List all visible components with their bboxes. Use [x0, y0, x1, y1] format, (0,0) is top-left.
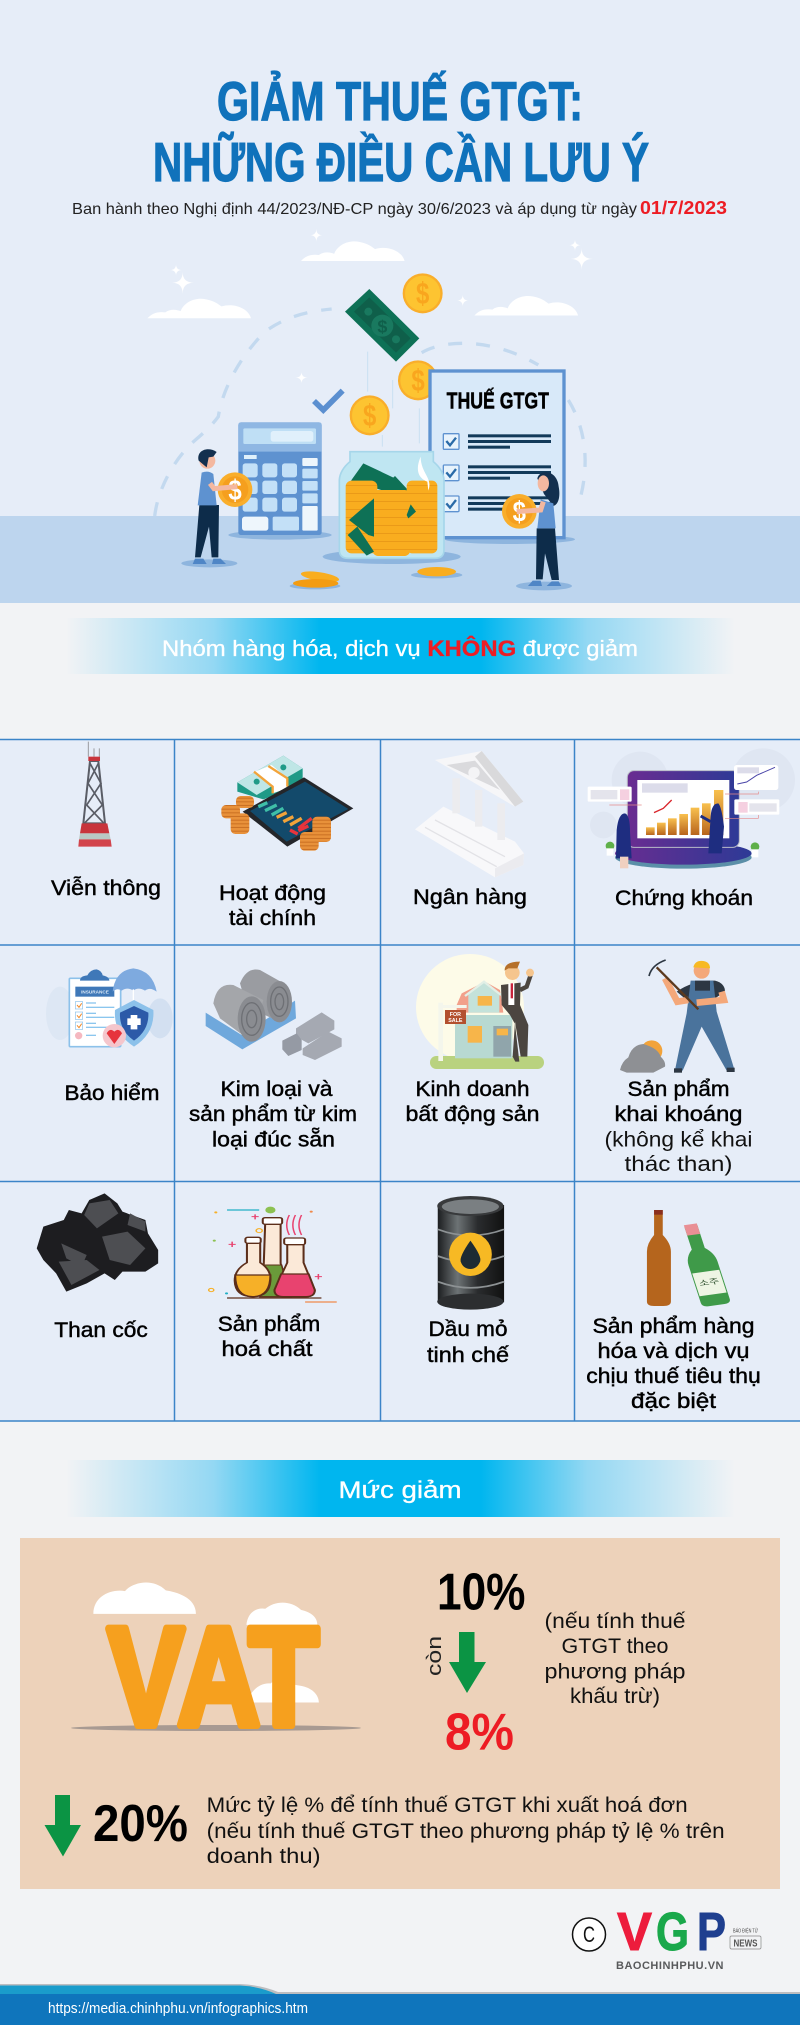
label: Chứng khoán	[615, 887, 753, 910]
deduction method note: khấu trừ)	[570, 1685, 660, 1708]
copyright mark: C	[583, 1922, 595, 1947]
icon: house and agent: FOR	[450, 1012, 461, 1018]
icon: flasks	[209, 1207, 337, 1302]
hero illustration	[155, 273, 585, 590]
man with coin	[181, 449, 252, 567]
percentage method note	[207, 1794, 725, 1868]
label: thác than)	[624, 1153, 732, 1176]
icon: tablet and money	[221, 756, 353, 851]
tax document: THUẾ GTGT	[447, 386, 549, 413]
cell: telecom	[51, 742, 161, 900]
label: Ngân hàng	[413, 886, 527, 909]
coins: $	[411, 364, 425, 398]
label: Sản phẩm hàng	[592, 1315, 754, 1338]
VGP wordmark: P	[697, 1902, 726, 1962]
banner: excluded goods: Nhóm hàng hóa, dịch vụ KHÔNG được giảm	[162, 636, 638, 661]
coins: $	[363, 399, 376, 433]
deduction method note	[544, 1610, 686, 1708]
coin piles	[290, 567, 462, 589]
coins: $	[416, 277, 429, 311]
tax document	[430, 371, 575, 544]
woman with coin: $	[513, 497, 526, 529]
label: khai khoáng	[614, 1103, 742, 1126]
cell: chemicals	[209, 1207, 337, 1361]
icon: bottles: 소주	[697, 1275, 721, 1288]
subtitle: 01/7/2023	[640, 198, 727, 218]
money jar	[323, 452, 461, 564]
label: Hoạt động	[219, 882, 326, 905]
clouds	[147, 241, 578, 318]
icon: house and agent	[416, 954, 544, 1069]
VGP wordmark	[617, 1902, 726, 1962]
label: tài chính	[229, 907, 316, 930]
label: hóa và dịch vụ	[598, 1340, 750, 1363]
VGP wordmark: G	[656, 1902, 689, 1962]
news tag: NEWS	[734, 1938, 758, 1950]
footer url: https://media.chinhphu.vn/infographics.htm	[48, 2000, 308, 2017]
falling lines	[368, 352, 419, 447]
check mark	[314, 391, 343, 410]
footer tab	[0, 1986, 276, 1994]
label: Dầu mỏ	[428, 1318, 508, 1341]
label	[406, 1078, 540, 1126]
arrow down	[449, 1632, 486, 1693]
copyright mark	[572, 1918, 606, 1951]
label: (không kể khai	[604, 1128, 752, 1152]
label	[218, 1313, 320, 1361]
label	[219, 882, 326, 930]
dashed arcs	[155, 309, 585, 516]
news tag	[730, 1926, 761, 1950]
label: Sản phẩm	[628, 1078, 730, 1101]
deduction method note: (nếu tính thuế	[544, 1610, 686, 1633]
logo: VGP news	[572, 1902, 761, 1972]
label: Sản phẩm	[218, 1313, 320, 1336]
icon: insurance clipboard and shield: INSURANCE	[81, 990, 109, 995]
panel: reduction details	[20, 1538, 780, 1889]
sky decoration	[147, 229, 593, 384]
title: GIẢM THUẾ GTGT:	[217, 70, 583, 132]
excluded goods grid	[0, 739, 800, 1421]
VAT illustration: VAT	[108, 1599, 319, 1756]
cell: banking	[413, 751, 527, 909]
rate 8 percent: 8%	[445, 1704, 514, 1762]
banknote	[345, 289, 419, 362]
cell: special consumption goods	[586, 1210, 761, 1413]
VAT illustration	[71, 1582, 361, 1756]
icon: stock chart	[588, 748, 795, 869]
site name: BAOCHINHPHU.VN	[616, 1960, 724, 1972]
VGP wordmark: V	[617, 1902, 652, 1962]
hero background	[0, 0, 800, 603]
cell: coke coal	[37, 1193, 158, 1342]
icon: bottles	[647, 1210, 731, 1307]
woman with coin	[502, 472, 572, 590]
footer bar	[0, 1994, 800, 2025]
cell: metals	[189, 969, 357, 1152]
rate 10 percent: 10%	[437, 1564, 526, 1622]
grid background	[0, 739, 800, 1421]
icon: miner	[620, 960, 735, 1073]
label: Than cốc	[54, 1319, 148, 1342]
sparkles	[170, 229, 593, 384]
title	[153, 70, 649, 193]
cell: real estate	[406, 954, 544, 1126]
footer shadow	[0, 1984, 800, 1994]
label	[586, 1315, 761, 1413]
label: hoá chất	[222, 1338, 313, 1361]
cell: finance	[219, 756, 353, 930]
cell: securities	[588, 748, 795, 910]
ground band	[0, 516, 800, 603]
footer	[0, 1984, 800, 2025]
label: Viễn thông	[51, 877, 161, 900]
panel background	[20, 1538, 780, 1889]
banner: reduction rate: Mức giảm	[338, 1477, 462, 1504]
label: sản phẩm từ kim	[189, 1103, 357, 1126]
label: đặc biệt	[631, 1390, 716, 1413]
cell: insurance	[46, 968, 173, 1105]
deduction method note: GTGT theo	[562, 1635, 668, 1658]
icon: house and agent: SALE	[448, 1018, 463, 1024]
percentage method note: Mức tỷ lệ % để tính thuế GTGT khi xuất hoá đơn	[207, 1794, 688, 1817]
percentage method note: (nếu tính thuế GTGT theo phương pháp tỷ lệ % trên	[207, 1820, 725, 1843]
icon: metal rolls and bars	[206, 969, 342, 1060]
label	[427, 1318, 509, 1367]
cell: refined oil	[427, 1196, 509, 1367]
deduction method note: phương pháp	[544, 1660, 686, 1684]
label: bất động sản	[406, 1103, 540, 1126]
label: chịu thuế tiêu thụ	[586, 1365, 761, 1388]
label: Kim loại và	[220, 1078, 333, 1101]
label	[189, 1078, 357, 1152]
label: con: còn	[424, 1636, 446, 1676]
man with coin: $	[228, 475, 242, 507]
coins	[350, 273, 443, 435]
subtitle: Ban hành theo Nghị định 44/2023/NĐ-CP ngày 30/6/2023 và áp dụng từ ngày	[72, 201, 637, 218]
icon: bank columns	[415, 751, 524, 877]
label	[604, 1078, 752, 1176]
label: tinh chế	[427, 1344, 509, 1367]
banner: reduction rate	[66, 1460, 735, 1517]
icon: telecom tower	[78, 742, 112, 847]
arrow down	[44, 1795, 81, 1856]
icon: coal	[37, 1193, 158, 1292]
icon: oil barrel	[437, 1196, 504, 1310]
label: Bảo hiểm	[64, 1082, 160, 1105]
rate 20 percent: 20%	[93, 1795, 188, 1853]
banknote: $	[377, 316, 387, 336]
cell: mining	[604, 960, 752, 1176]
banner: excluded goods	[66, 618, 735, 674]
news tag: BÁO ĐIỆN TỬ	[733, 1926, 758, 1934]
label: loại đúc sẵn	[212, 1128, 335, 1152]
label: Kinh doanh	[416, 1078, 530, 1101]
percentage method note: doanh thu)	[207, 1845, 321, 1868]
hero panel	[0, 0, 800, 603]
calculator	[228, 422, 332, 540]
